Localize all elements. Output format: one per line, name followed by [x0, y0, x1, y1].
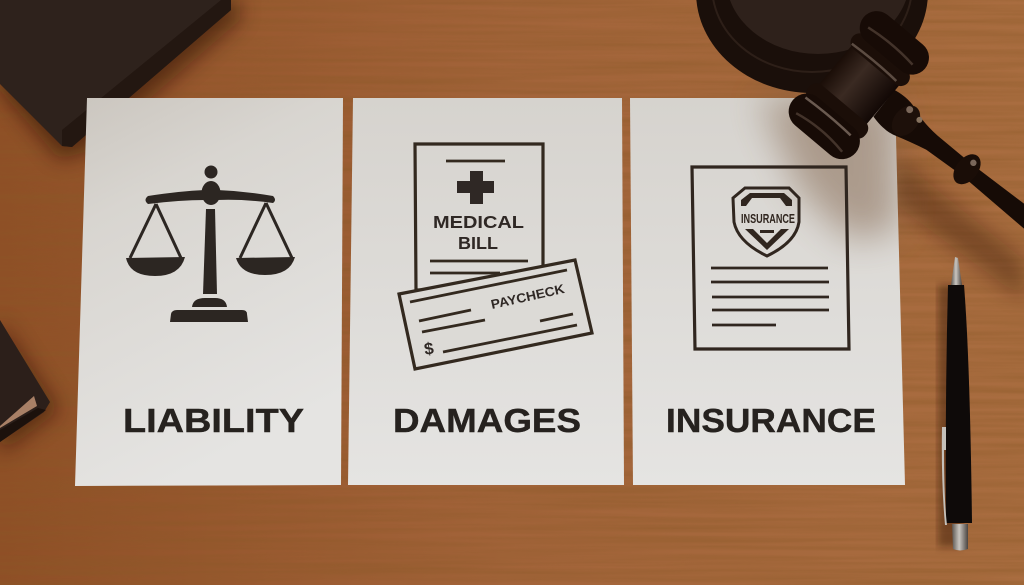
heading: insurance: INSURANCE [666, 402, 876, 439]
icon: paycheck: PAYCHECK [489, 281, 567, 312]
icon: shield badge [733, 188, 799, 256]
text lines [711, 268, 829, 325]
pen [942, 257, 972, 550]
icon: medical bill [415, 144, 543, 290]
heading: liability: LIABILITY [123, 402, 304, 439]
heading: damages: DAMAGES [393, 402, 581, 439]
icon: medical bill: MEDICAL [433, 212, 524, 232]
icon: paycheck: $ [423, 339, 435, 359]
icon: medical bill: BILL [458, 233, 498, 253]
gavel sound block [696, 0, 928, 93]
gavel shadow on paper [760, 98, 899, 240]
book: left edge [0, 320, 50, 442]
panel: insurance [630, 98, 905, 485]
icon: shield badge: INSURANCE [741, 211, 795, 226]
icon: insurance document [692, 167, 849, 349]
book: top left [0, 0, 231, 147]
gavel handle [872, 89, 1024, 236]
icon: paycheck [399, 260, 592, 369]
gavel head [781, 3, 937, 167]
gavel [781, 3, 1024, 236]
icon: scales of justice [126, 166, 295, 322]
panel: damages [348, 98, 624, 485]
panel: liability [75, 98, 343, 486]
